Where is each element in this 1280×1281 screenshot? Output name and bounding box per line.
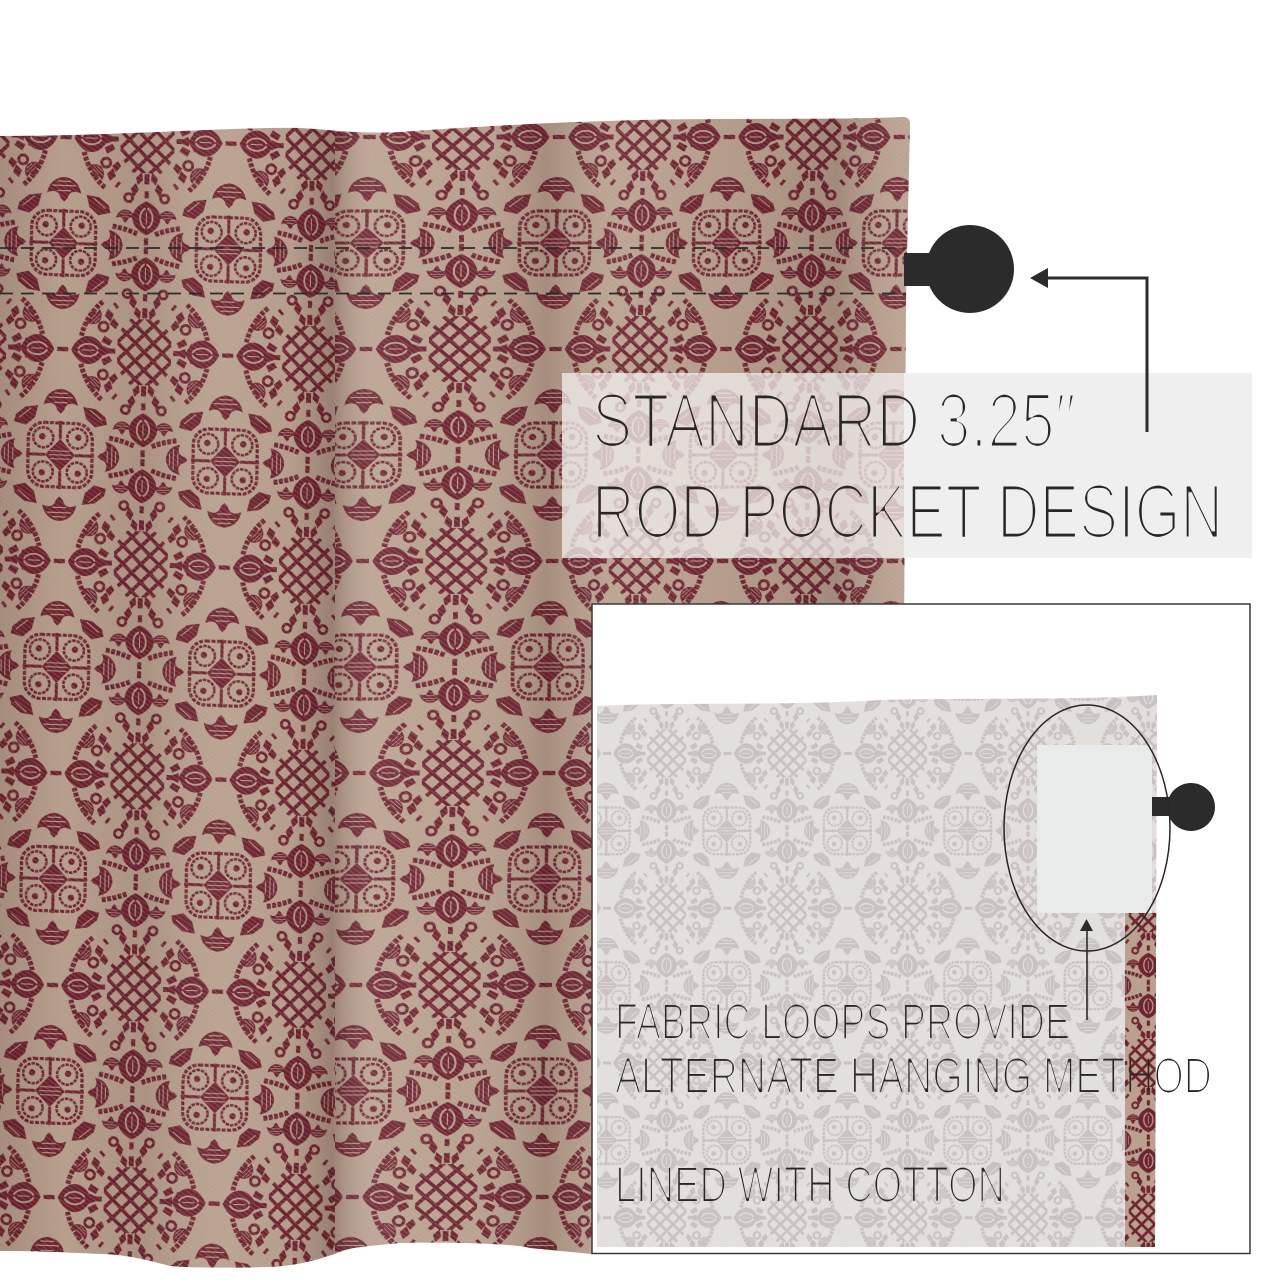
inset highlight ellipse bbox=[1004, 705, 1170, 951]
heading line one: STANDARD 3.25″ bbox=[592, 378, 1076, 464]
inset blank loop rectangle bbox=[1037, 745, 1152, 913]
fabric fold shading bbox=[0, 100, 915, 1281]
rod pocket stitch lines bbox=[0, 248, 906, 294]
arrow: inset points to loop bbox=[1080, 919, 1093, 1020]
callout: rod pocket label band bbox=[562, 373, 1252, 558]
arrow: points from label to rod pocket bbox=[1030, 268, 1147, 373]
icon: curtain rod with finial bbox=[904, 225, 1014, 313]
panel: patterned curtain fabric bbox=[0, 100, 915, 1281]
inset desaturated pattern bbox=[597, 690, 1159, 1247]
panel: inset fabric loops detail bbox=[592, 604, 1250, 1254]
icon: inset curtain rod with finial bbox=[1152, 783, 1215, 831]
fabric weave texture bbox=[0, 100, 915, 1281]
inset frame bbox=[592, 604, 1250, 1254]
fabric pattern left fold bbox=[0, 100, 335, 1281]
inset exposed fabric strip bbox=[1125, 913, 1157, 1247]
arrow tail over band bbox=[1146, 373, 1148, 432]
inset faded fabric bbox=[597, 690, 1159, 1247]
inset text: lined with cotton: LINED WITH COTTON bbox=[615, 1156, 1005, 1213]
fabric pattern right fold bbox=[557, 100, 915, 1281]
fabric pattern centre fold bbox=[335, 100, 557, 1281]
inset text: fabric loops line one: FABRIC LOOPS PROVIDE bbox=[615, 993, 1070, 1050]
